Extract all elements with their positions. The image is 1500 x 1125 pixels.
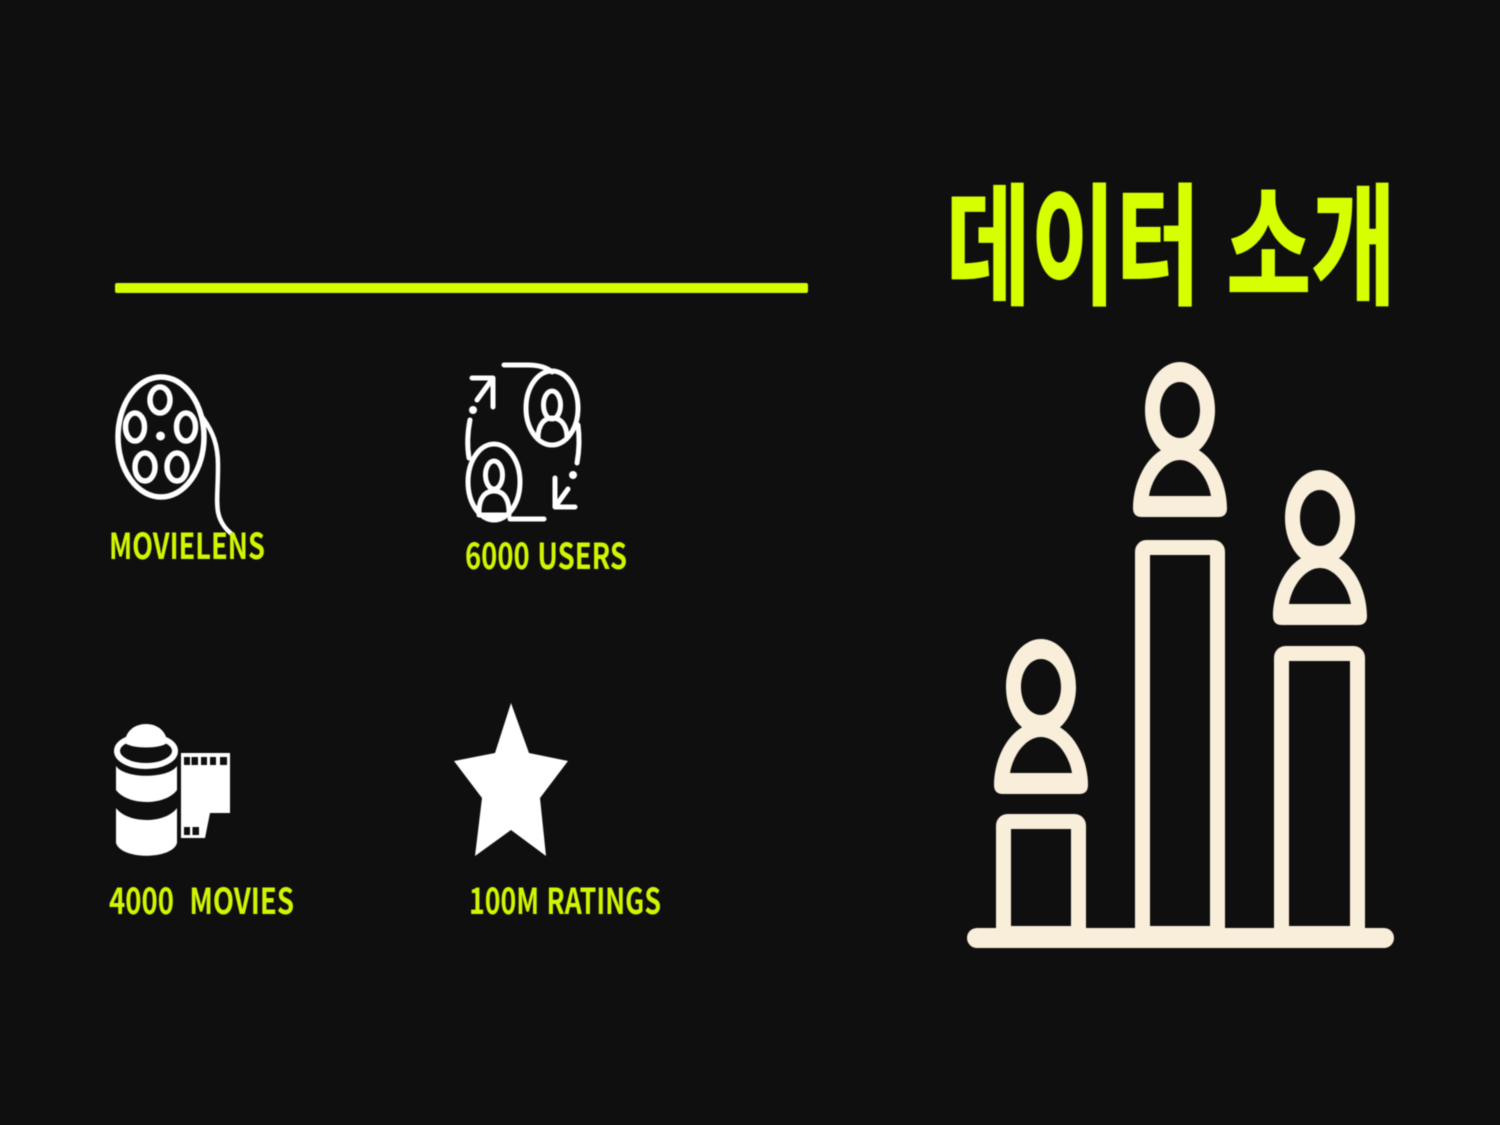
label: ratings: 100M RATINGS <box>469 873 661 925</box>
person: centre <box>1133 362 1227 517</box>
label: MovieLens: MOVIELENS <box>109 518 265 570</box>
baseline <box>967 928 1394 948</box>
bar: medium <box>1282 654 1358 934</box>
icon: film reel <box>118 377 233 535</box>
label: users: 6000 USERS <box>465 528 627 580</box>
bar: tall <box>1142 548 1218 934</box>
icon: star <box>454 703 568 856</box>
icon: users exchange <box>468 365 579 520</box>
icon: film canister <box>116 724 230 856</box>
chart: people on bars <box>967 362 1394 948</box>
label: movies: 4000 MOVIES <box>109 873 294 925</box>
bar: short <box>1004 822 1078 934</box>
person: left <box>994 639 1088 794</box>
person: right <box>1273 470 1367 625</box>
heading rule <box>115 283 808 293</box>
